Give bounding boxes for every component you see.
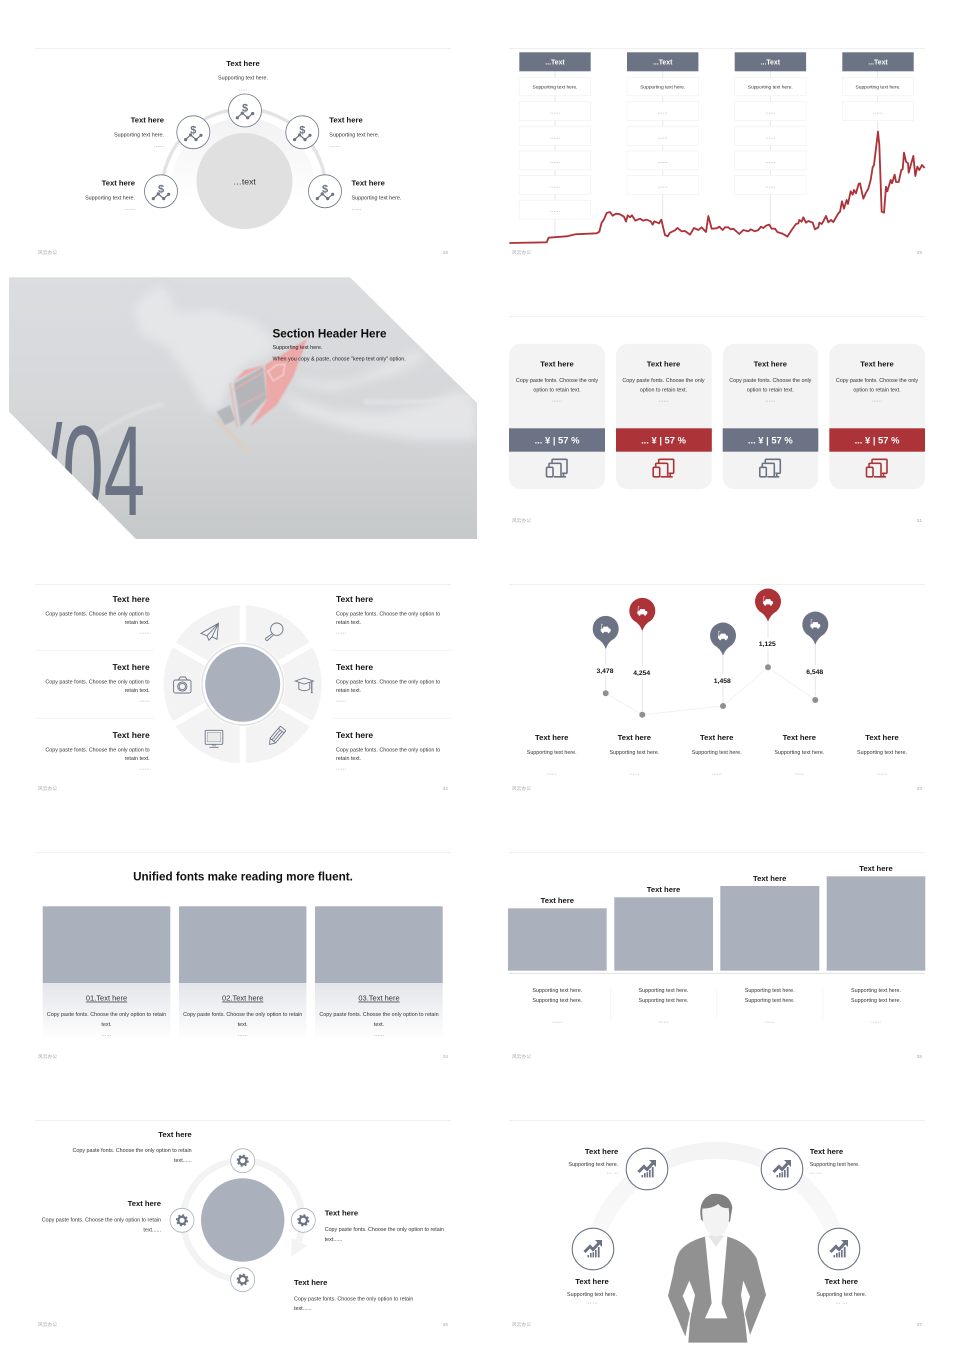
icon: gear left <box>170 1208 194 1232</box>
text block: column 4: Supporting text here. <box>774 750 824 756</box>
text block: column 1: ...... <box>552 1018 563 1024</box>
footer: 风云办公 <box>38 1053 57 1060</box>
footer <box>512 785 922 792</box>
column 2: ...... <box>658 110 668 116</box>
text block: top: Text here <box>226 59 260 68</box>
text block: right 1: Copy paste fonts. Choose the only option to <box>336 612 440 618</box>
footer: 36 <box>443 1322 448 1328</box>
text block: column 3: Supporting text here. <box>745 998 795 1004</box>
text block: column 3: Supporting text here. <box>745 988 795 994</box>
text block: top: text...... <box>174 1158 192 1164</box>
photo: windsurfer <box>9 277 477 543</box>
icon: dollar chart lower left <box>144 175 178 208</box>
text block: left 1 <box>45 594 150 636</box>
text block: upper right: Supporting text here. <box>810 1162 860 1168</box>
card 3: text. <box>374 1022 384 1028</box>
pin 3: 1,458 <box>714 678 731 685</box>
text block: lower left: Text here <box>102 179 135 188</box>
text block: upper left: ...... <box>154 143 164 149</box>
column 3: Supporting text here. <box>748 85 793 91</box>
card 1: 01.Text here <box>86 994 127 1003</box>
text block: upper right <box>810 1147 860 1176</box>
text block: lower right: Text here <box>352 179 385 188</box>
panel: cycle diagram <box>35 1120 451 1328</box>
text block: lower right: ...... <box>352 206 362 212</box>
card 3: Text here <box>754 359 787 368</box>
icon: camera <box>174 677 191 693</box>
card 2: ...... <box>238 1032 248 1038</box>
text block: top <box>72 1130 192 1164</box>
text block: upper left <box>568 1147 619 1176</box>
text block: column 2: ...... <box>658 1018 669 1024</box>
text block: top: Text here <box>158 1130 192 1139</box>
text block: column 2: Supporting text here. <box>639 988 688 994</box>
text block: column 2: Supporting text here. <box>639 998 688 1004</box>
text block: left 1: Text here <box>113 594 150 604</box>
text block: column 2: ...... <box>629 770 640 776</box>
card 4: ...... <box>872 398 882 404</box>
icon: paper plane <box>201 623 218 640</box>
text block: right: Text here <box>325 1208 358 1217</box>
section heading: When you copy & paste, choose "keep text only" option. <box>272 356 406 362</box>
section heading: Section Header Here <box>272 327 387 340</box>
footer: 29 <box>917 250 922 256</box>
text block: left <box>42 1199 161 1234</box>
panel: three picture cards <box>35 852 451 1060</box>
icon: chart lower left <box>572 1228 614 1270</box>
text block: right 2 <box>336 662 440 704</box>
text block: lower left <box>85 179 135 212</box>
footer: 31 <box>917 518 922 524</box>
icon: gear bottom <box>231 1268 255 1292</box>
card 2 <box>179 906 306 1040</box>
pin 4 <box>755 589 781 670</box>
pin 1: 3,478 <box>596 668 614 675</box>
column 3 <box>735 52 806 194</box>
text block: left 3: Copy paste fonts. Choose the only option to <box>45 748 150 754</box>
text block: column 1: Text here <box>535 733 568 742</box>
text block: bottom: Copy paste fonts. Choose the only option to retain <box>294 1297 413 1303</box>
text block: upper left: Text here <box>131 116 164 125</box>
text block: bottom: text...... <box>294 1306 312 1312</box>
text block: left: Copy paste fonts. Choose the only option to retain <box>42 1218 161 1224</box>
text block: left 2: ...... <box>140 698 150 704</box>
text block: left 3: ...... <box>140 766 150 772</box>
card 1: Copy paste fonts. Choose the only option to retain <box>47 1012 166 1018</box>
panel: section header with photo <box>9 277 477 543</box>
column 2: ...... <box>658 184 668 190</box>
icon: dollar chart upper left <box>177 116 210 149</box>
card 1: ...... <box>552 398 562 404</box>
footer: 28 <box>443 250 448 256</box>
icon: dollar chart upper right <box>286 116 319 149</box>
text block: column 1: Supporting text here. <box>532 988 582 994</box>
text block: column 2: Supporting text here. <box>609 750 659 756</box>
text block: lower left: Text here <box>575 1277 609 1286</box>
center circle <box>202 644 284 725</box>
footer: 风云办公 <box>512 517 531 524</box>
card 4 <box>829 344 925 489</box>
text block: lower right <box>352 179 401 212</box>
card 3: ... ¥ | 57 % <box>748 434 793 445</box>
icon: dollar chart lower right <box>308 175 342 208</box>
text block: upper right <box>329 116 379 149</box>
footer <box>38 1321 448 1328</box>
text block: column 1 <box>532 988 582 1024</box>
column 1 <box>519 52 591 219</box>
footer <box>512 1053 922 1060</box>
text block: left 2: retain text. <box>125 688 150 694</box>
person figure <box>668 1194 766 1343</box>
column 1: ...... <box>550 208 560 214</box>
text block: left 2: Text here <box>113 662 150 672</box>
text block: column 1: ...... <box>547 770 557 776</box>
column 3: ...... <box>765 159 776 165</box>
text block: column 4 <box>851 988 901 1024</box>
icon: graduation cap <box>295 678 313 693</box>
text block: column 1: Supporting text here. <box>527 750 577 756</box>
center circle: …text <box>233 176 256 186</box>
footer <box>512 1321 922 1328</box>
text block: column 4: ...... <box>794 770 805 776</box>
text block: left: text...... <box>143 1228 161 1234</box>
footer <box>38 249 448 256</box>
icon: chart lower right <box>818 1228 860 1270</box>
text block: right 1: Text here <box>336 594 373 604</box>
card 2: ...... <box>658 398 669 404</box>
panel: timeline line chart <box>509 48 925 256</box>
wheel segments <box>170 600 316 768</box>
arc <box>593 1150 839 1249</box>
card 1: option to retain text. <box>533 388 581 394</box>
footer: 32 <box>443 786 448 792</box>
card 2 <box>616 344 712 489</box>
icon: dollar chart lower right: $ <box>322 184 328 196</box>
footer: 风云办公 <box>512 1053 531 1060</box>
card 4: ... ¥ | 57 % <box>855 434 900 445</box>
pin 5 <box>802 612 828 703</box>
text block: upper right: Text here <box>810 1147 843 1156</box>
text block: upper right: ...... <box>329 143 340 149</box>
panel: four price cards <box>509 316 925 524</box>
card 4: option to retain text. <box>853 388 901 394</box>
icon: chart upper left <box>626 1148 668 1190</box>
text block: upper right: Text here <box>329 116 363 125</box>
icon: dollar chart top: $ <box>242 103 248 115</box>
panel: ascending blocks <box>508 852 925 1060</box>
text block: column 2 <box>639 988 688 1024</box>
text block: lower left <box>567 1277 617 1306</box>
card 3: ...... <box>374 1032 384 1038</box>
column 3: ...... <box>765 184 776 190</box>
block 4: Text here <box>859 864 893 873</box>
column 3: ...... <box>765 110 776 116</box>
text block: right 1 <box>336 594 440 636</box>
text block: left 2 <box>45 662 150 704</box>
text block: left 1: retain text. <box>125 620 150 626</box>
card 2: option to retain text. <box>640 388 687 394</box>
pin 2 <box>629 598 655 718</box>
card 2: Text here <box>647 359 680 368</box>
icon: magnifier <box>266 623 283 640</box>
footer: 33 <box>917 786 922 792</box>
text block: column 4: Text here <box>783 733 816 742</box>
card 3: Copy paste fonts. Choose the only <box>729 378 812 384</box>
text block: column 3: Text here <box>700 733 733 742</box>
arrow: circular cycle <box>183 1160 307 1280</box>
text block: column 3 <box>692 733 742 776</box>
card 3: Copy paste fonts. Choose the only option to retain <box>319 1012 439 1018</box>
text block: column 5: Text here <box>865 733 899 742</box>
card 4: Copy paste fonts. Choose the only <box>836 378 918 384</box>
text block: right 3: Copy paste fonts. Choose the only option to <box>336 748 440 754</box>
block 4 <box>827 864 925 971</box>
text block: left 3 <box>45 730 150 772</box>
footer <box>38 785 448 792</box>
icon: monitor <box>205 730 223 747</box>
column 1: ...... <box>550 110 560 116</box>
icon: dollar chart lower left: $ <box>158 184 164 196</box>
footer: 34 <box>443 1054 448 1060</box>
text block: column 5 <box>857 733 907 776</box>
text block: column 4 <box>774 733 824 776</box>
column 3: ...Text <box>761 60 781 66</box>
column 4: Supporting text here. <box>856 85 900 91</box>
pin 4: 1,125 <box>759 641 776 648</box>
column 3: ...... <box>765 134 776 140</box>
inner fading half disk <box>170 118 316 200</box>
column 2 <box>627 52 698 194</box>
footer: 35 <box>917 1054 922 1060</box>
text block: top <box>218 59 268 92</box>
text block: right <box>325 1208 444 1243</box>
text block: left 2: Copy paste fonts. Choose the only option to <box>45 680 150 686</box>
text block: column 5: ...... <box>877 770 887 776</box>
text block: column 1: Supporting text here. <box>532 998 582 1004</box>
card 3: 03.Text here <box>358 994 400 1003</box>
panel: semicircle diagram <box>35 48 451 256</box>
card 4: Text here <box>860 359 894 368</box>
card 3: option to retain text. <box>747 388 794 394</box>
text block: column 3: ...... <box>712 770 722 776</box>
card 1: text. <box>101 1022 112 1028</box>
card 2: Copy paste fonts. Choose the only option to retain <box>183 1012 302 1018</box>
text block: left 3: retain text. <box>125 756 150 762</box>
column 2: ...Text <box>653 60 673 66</box>
footer: 风云办公 <box>38 785 57 792</box>
icon: dollar chart top <box>228 94 262 127</box>
footer: 风云办公 <box>38 249 57 256</box>
footer: 风云办公 <box>512 249 531 256</box>
pin 3 <box>710 623 736 709</box>
text block: right 3: Text here <box>336 730 373 740</box>
card 3 <box>723 344 818 489</box>
icon: dollar chart upper left: $ <box>190 125 196 137</box>
text block: column 3: ...... <box>765 1018 775 1024</box>
text block: left 1: ...... <box>140 630 150 636</box>
text block: lower left: Supporting text here. <box>567 1292 617 1298</box>
pin 5: 6,548 <box>806 669 823 676</box>
text block: column 4: ...... <box>871 1018 881 1024</box>
text block: upper right: Supporting text here. <box>329 132 379 138</box>
footer <box>512 249 922 256</box>
icon: dollar chart upper right: $ <box>299 125 305 137</box>
card 1: ... ¥ | 57 % <box>535 434 580 445</box>
column 2: ...... <box>658 159 668 165</box>
panel: map pin chart <box>509 584 925 792</box>
block 3 <box>720 874 819 971</box>
block 2: Text here <box>647 885 680 894</box>
column 4: ...Text <box>868 60 888 66</box>
text block: column 1 <box>527 733 577 776</box>
text block: right: Copy paste fonts. Choose the only option to retain <box>325 1227 444 1233</box>
text block: lower right: ... ... <box>835 1300 847 1306</box>
column 4 <box>842 52 914 120</box>
text block: column 3: Supporting text here. <box>692 750 742 756</box>
column connector lines <box>555 71 878 238</box>
icon: gear top <box>231 1149 255 1173</box>
text block: lower right: Text here <box>825 1277 858 1286</box>
text block: left 1: Copy paste fonts. Choose the only option to <box>45 612 150 618</box>
card 2: Copy paste fonts. Choose the only <box>622 378 705 384</box>
text block: upper left: Text here <box>585 1147 618 1156</box>
text block: upper left: Supporting text here. <box>114 132 164 138</box>
card 1: Text here <box>540 359 574 368</box>
center circle <box>196 133 292 229</box>
text block: right 2: Text here <box>336 662 373 672</box>
icon: pencil <box>267 726 286 747</box>
text block: right: text...... <box>325 1237 342 1243</box>
panel: wheel with six icons <box>35 584 451 792</box>
card 3: ...... <box>765 398 776 404</box>
block 1: Text here <box>541 896 574 905</box>
text block: upper left <box>114 116 164 149</box>
block 1 <box>508 896 607 971</box>
card 2: text. <box>238 1022 248 1028</box>
red line chart <box>509 132 925 243</box>
heading: Unified fonts make reading more fluent. <box>133 870 353 883</box>
text block: lower right: Supporting text here. <box>352 195 401 201</box>
text block: top: Copy paste fonts. Choose the only option to retain <box>72 1148 192 1154</box>
text block: upper left: ... ... <box>607 1170 619 1176</box>
column 2: Supporting text here. <box>640 85 685 91</box>
text block: right 2: retain text. <box>336 688 361 694</box>
text block: lower left: ...... <box>125 206 135 212</box>
column 1: ...Text <box>545 60 565 66</box>
footer: 风云办公 <box>38 1321 57 1328</box>
text block: right 2: Copy paste fonts. Choose the only option to <box>336 680 440 686</box>
icon: chart upper right <box>761 1148 803 1190</box>
block 2 <box>614 885 713 971</box>
text block: lower right: Supporting text here. <box>816 1292 866 1298</box>
text block: column 4: Supporting text here. <box>851 988 901 994</box>
text block: right 3: retain text. <box>336 756 361 762</box>
card 2: ... ¥ | 57 % <box>641 434 687 445</box>
footer <box>512 517 922 524</box>
column 1: ...... <box>550 134 560 140</box>
text block: top: ..... <box>239 86 247 92</box>
column 4: ...... <box>873 110 883 116</box>
text block: right 1: ...... <box>336 630 346 636</box>
text block: lower left: ... ... <box>586 1300 598 1306</box>
card 1: ...... <box>101 1032 112 1038</box>
section heading: Supporting text here. <box>272 345 322 351</box>
text block: right 3 <box>336 730 440 772</box>
card 1: Copy paste fonts. Choose the only <box>516 378 598 384</box>
text block: upper right: ... ... <box>810 1170 822 1176</box>
pin 1 <box>593 616 619 696</box>
column 1: ...... <box>550 184 560 190</box>
column 2: ...... <box>658 134 668 140</box>
icon: gear right <box>291 1208 315 1232</box>
block 3: Text here <box>753 874 786 883</box>
text block: right 3: ...... <box>336 766 346 772</box>
panel: person with arc <box>509 1120 925 1343</box>
pin 2: 4,254 <box>633 670 650 677</box>
text block: lower right <box>816 1277 866 1306</box>
text block: column 3 <box>745 988 795 1024</box>
footer: 风云办公 <box>512 785 531 792</box>
column 1: ...... <box>550 159 560 165</box>
text block: bottom: Text here <box>294 1278 327 1287</box>
text block: lower left: Supporting text here. <box>85 195 135 201</box>
text block: column 2 <box>609 733 659 776</box>
text block: right 2: ...... <box>336 698 346 704</box>
column 1: Supporting text here. <box>533 85 577 91</box>
footer <box>38 1053 448 1060</box>
footer: 风云办公 <box>512 1321 531 1328</box>
text block: upper left: Supporting text here. <box>568 1162 618 1168</box>
connecting line <box>606 667 815 715</box>
text block: left 3: Text here <box>113 730 150 740</box>
card 3 <box>315 906 443 1040</box>
card 1 <box>43 906 170 1040</box>
footer: 37 <box>917 1322 922 1328</box>
card 1 <box>509 344 605 489</box>
text block: top: Supporting text here. <box>218 76 268 82</box>
text block: left: Text here <box>128 1199 161 1208</box>
big number: /04 <box>42 400 145 543</box>
text block: column 5: Supporting text here. <box>857 750 907 756</box>
section heading <box>272 327 406 362</box>
center circle <box>201 1178 284 1262</box>
card 2: 02.Text here <box>222 994 263 1003</box>
text block: column 2: Text here <box>618 733 651 742</box>
outer arc <box>162 109 326 191</box>
text block: bottom <box>294 1278 413 1312</box>
text block: right 1: retain text. <box>336 620 361 626</box>
text block: column 4: Supporting text here. <box>851 998 901 1004</box>
